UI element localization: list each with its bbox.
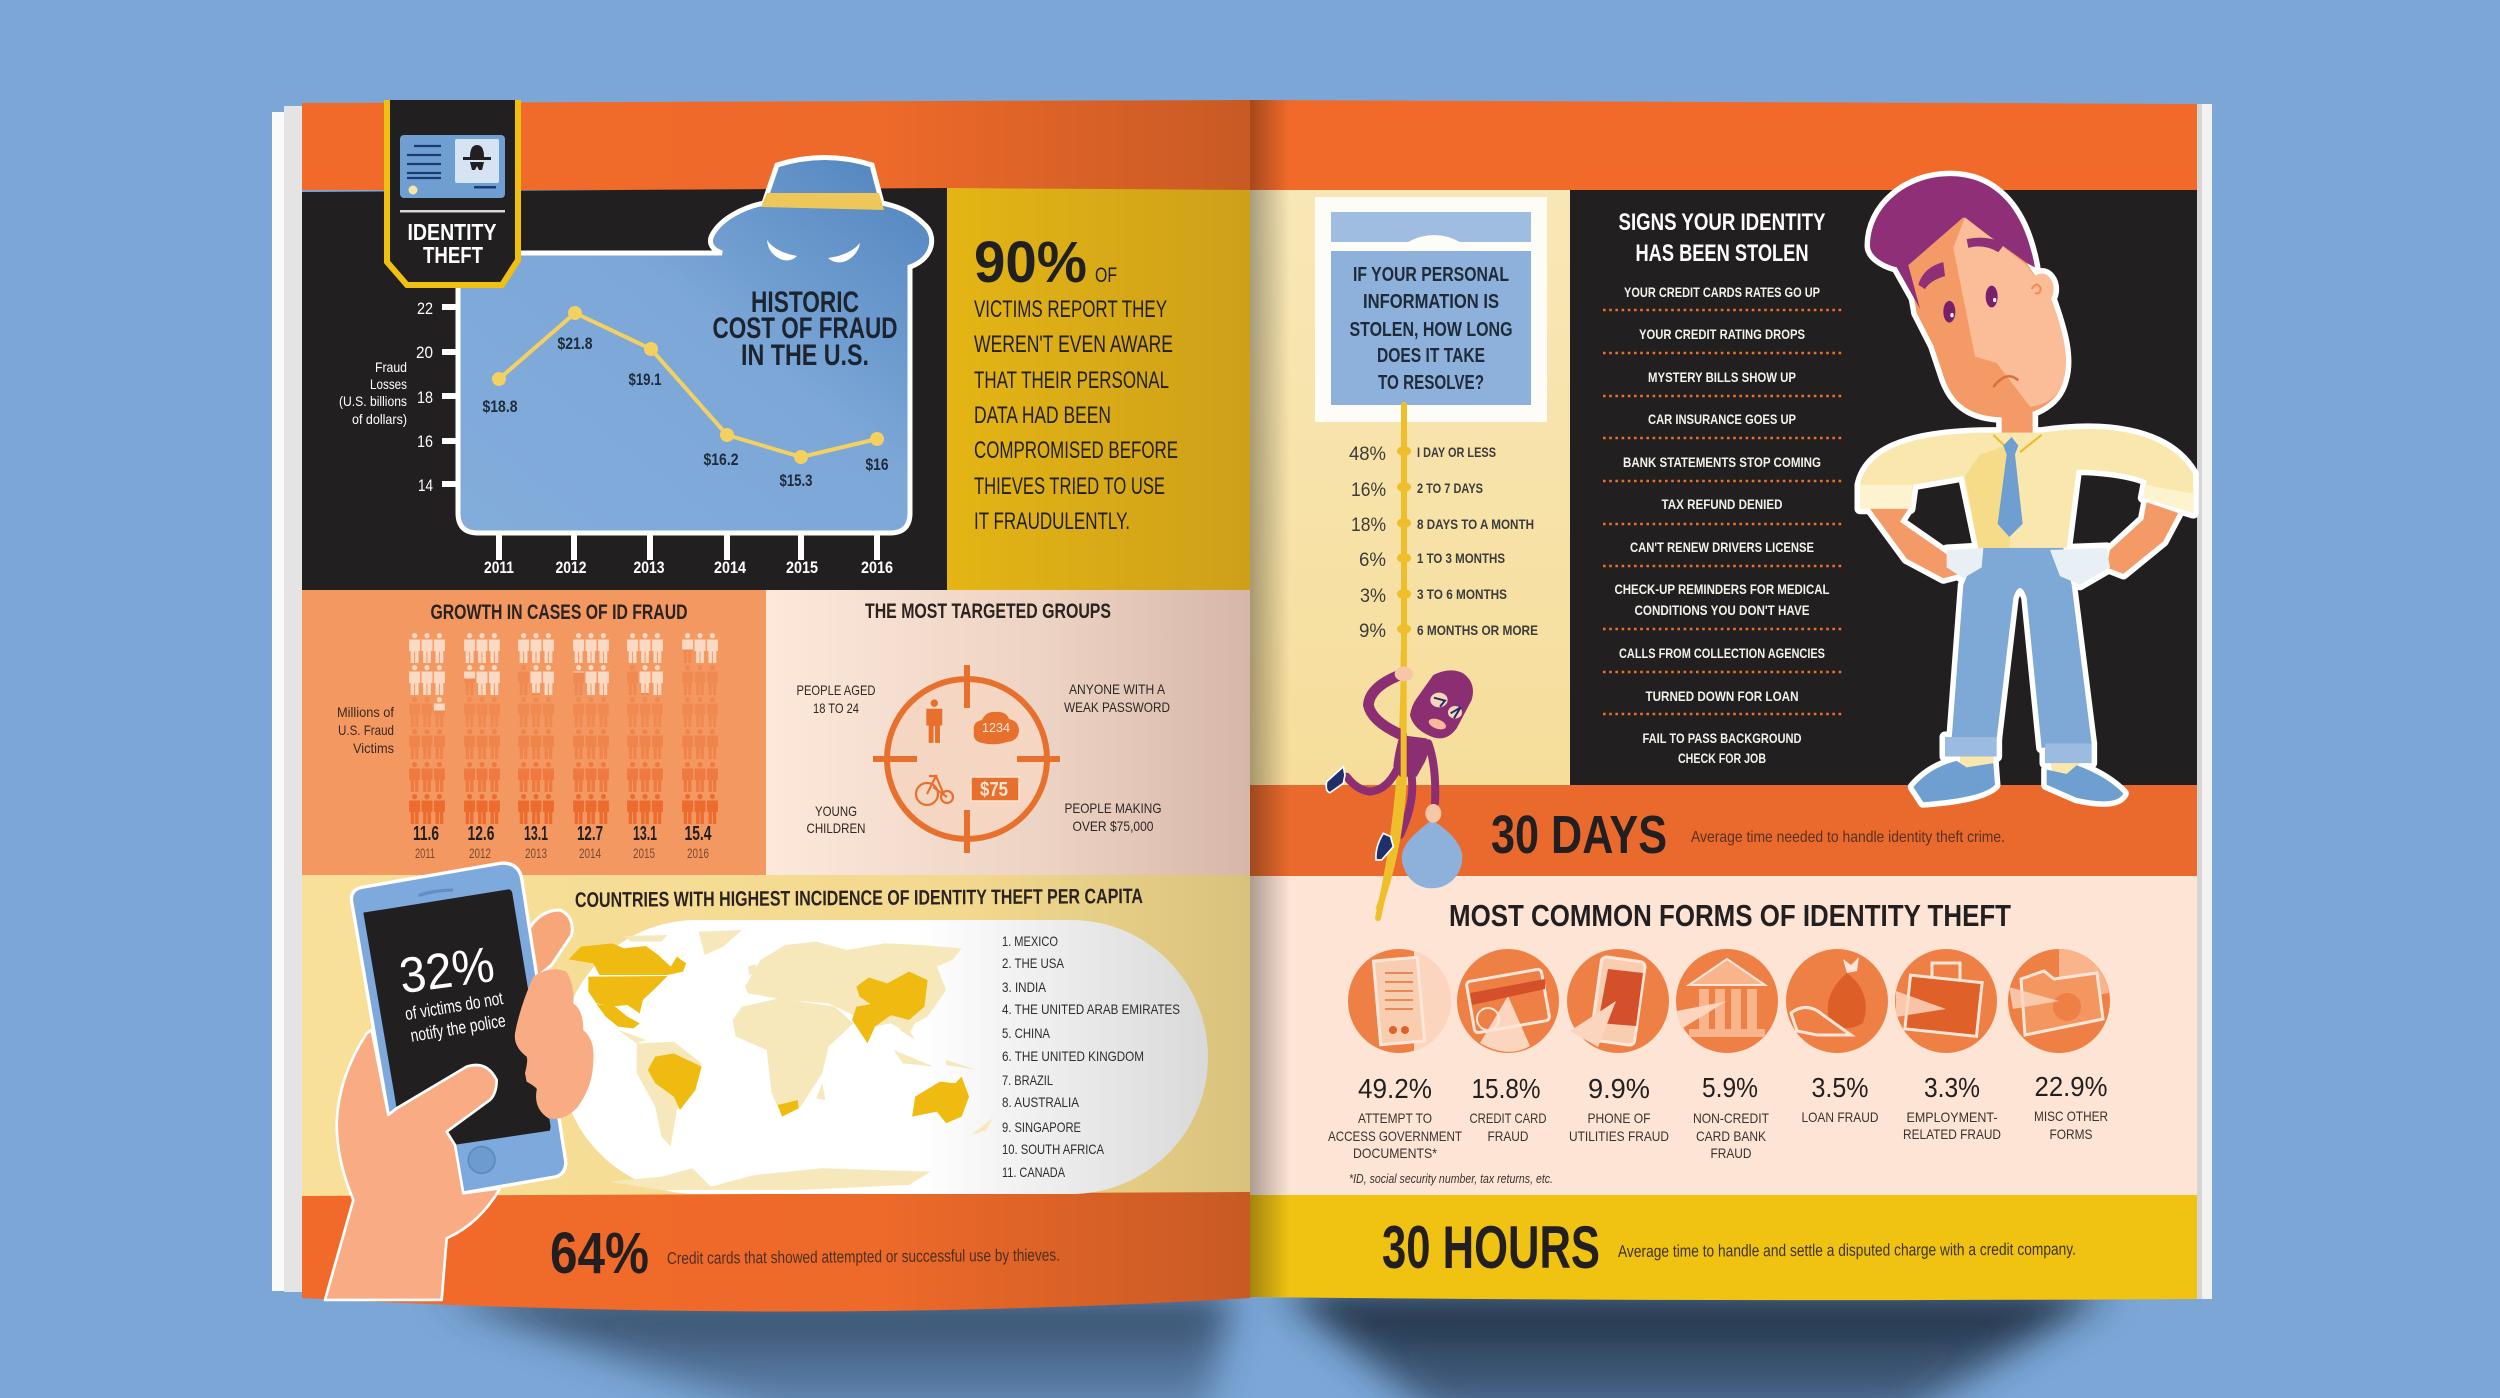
group labels: YOUNG [815,803,857,819]
chart title: IN THE U.S. [741,339,869,372]
signs list: MYSTERY BILLS SHOW UP [1648,370,1796,385]
icon: tricycle [916,776,953,805]
y axis title: of dollars) [352,411,407,427]
timeline: percent list [1349,405,1538,918]
callout: 64%: Credit cards that showed attempted or successful use by thieves. [667,1246,1060,1268]
country list: 6. THE UNITED KINGDOM [1002,1048,1144,1064]
loot bag [1402,820,1462,888]
icon: money: $75 [980,779,1008,801]
value labels: $16 [866,455,888,474]
years: 2016 [687,845,709,861]
duration labels: 3 TO 6 MONTHS [1417,586,1507,602]
spine shade [1250,100,1290,1297]
percent values: 9.9% [1588,1073,1650,1104]
category labels: UTILITIES FRAUD [1569,1128,1669,1144]
category labels: CREDIT CARD [1470,1110,1546,1126]
duration labels: 6 MONTHS OR MORE [1417,622,1538,638]
band text: 30 days: Average time needed to handle identity theft crime. [1691,829,2005,846]
icon: document [1348,949,1451,1053]
y axis labels [416,299,433,495]
chart title [712,286,898,372]
rear finger [528,910,572,980]
band: 30 days [1250,785,2197,876]
phone text: notify the police [409,1010,507,1046]
country list: 8. AUSTRALIA [1002,1094,1080,1110]
sign text: TO RESOLVE? [1378,372,1484,394]
sign text: STOLEN, HOW LONG [1350,319,1512,341]
band text: 30 days: 30 DAYS [1491,805,1667,865]
percent values: 48% [1349,444,1386,465]
country list: 9. SINGAPORE [1002,1119,1081,1135]
duration labels [1417,444,1538,638]
top orange band left [302,100,1250,190]
callout: 90%: 90% [974,230,1087,295]
category labels: FRAUD [1710,1145,1752,1161]
duration labels: 1 TO 3 MONTHS [1417,550,1505,566]
left page [302,100,1250,1312]
callout: 90%: THAT THEIR PERSONAL [974,367,1169,394]
group labels: WEAK PASSWORD [1064,699,1170,715]
phone text: 32% [396,936,498,1004]
rope [1378,405,1404,918]
icon: folder [2008,949,2110,1053]
duration labels: 2 TO 7 DAYS [1417,480,1483,496]
category labels: FORMS [2050,1126,2092,1142]
x axis labels: 2014 [714,558,746,577]
signs list: CONDITIONS YOU DON'T HAVE [1634,603,1810,618]
eyebrows [1918,238,2005,289]
illustration: hand holding phone [325,863,594,1300]
heading: COUNTRIES WITH HIGHEST INCIDENCE OF IDENTITY THEFT PER CAPITA [575,885,1143,912]
values: 12.7 [577,823,603,845]
x axis labels: 2013 [634,558,664,577]
page stack left [272,106,302,1292]
panel: gold 90% [947,188,1250,590]
callout: 90% [974,230,1178,535]
phone body [351,863,566,1193]
category labels [1328,1108,2108,1161]
value labels [482,334,888,490]
icon row [1348,949,2110,1053]
values: 13.1 [633,823,657,845]
sign text: INFORMATION IS [1363,291,1499,313]
category labels: DOCUMENTS* [1353,1145,1437,1161]
y axis title: (U.S. billions [339,393,407,409]
top orange band right [1250,100,2197,190]
shirt shade [1965,446,2010,548]
sign: resolve question [1315,197,1547,422]
panel content: most targeted groups [796,600,1170,853]
chart panel with hat silhouette [458,158,932,533]
ear swirl [2032,285,2041,294]
values: 15.4 [684,823,712,845]
pictogram rows [409,633,718,824]
band text: 30 hours [1382,1214,2076,1281]
panel: most common forms [1250,876,2197,1196]
panel: resolve time [1250,190,1570,786]
values [413,823,712,845]
category labels: ATTEMPT TO [1358,1110,1432,1126]
years: 2012 [469,845,491,861]
icon: ID card [400,135,505,198]
hat band [761,193,884,210]
country list: 11. CANADA [1002,1164,1066,1180]
panel: signs black [1570,190,2197,786]
years: 2015 [633,845,655,861]
chart title: HISTORIC [751,286,859,319]
heading: THE MOST TARGETED GROUPS [865,600,1111,623]
percent values: 5.9% [1702,1072,1758,1103]
category labels: CARD BANK [1696,1128,1767,1144]
years: 2014 [579,845,601,861]
y axis title: Fraud [375,359,407,375]
signs list: CAR INSURANCE GOES UP [1648,412,1796,427]
x axis labels: 2011 [484,558,514,577]
y axis ticks [442,304,456,487]
sign text [1350,264,1512,394]
sign text: IF YOUR PERSONAL [1353,264,1509,286]
signs list: CALLS FROM COLLECTION AGENCIES [1619,646,1825,661]
target crosshair [873,665,1060,853]
country list: 4. THE UNITED ARAB EMIRATES [1002,1001,1180,1017]
callout: 90%: WEREN'T EVEN AWARE [974,331,1173,358]
mouth [1993,376,2018,387]
callout: 90%: THIEVES TRIED TO USE [974,473,1165,500]
percent values: 49.2% [1358,1073,1432,1104]
x axis labels: 2012 [556,558,586,577]
panel: most targeted groups [766,590,1250,878]
hand [325,969,594,1300]
category labels: ACCESS GOVERNMENT [1328,1128,1462,1144]
callout: 90%: COMPROMISED BEFORE [974,437,1178,464]
group labels: ANYONE WITH A [1069,681,1166,697]
value labels: $16.2 [704,450,738,469]
bottom orange band left [302,1192,1250,1312]
country list: 10. SOUTH AFRICA [1002,1141,1105,1157]
signs list: YOUR CREDIT CARDS RATES GO UP [1624,285,1820,300]
category labels: NON-CREDIT [1693,1110,1769,1126]
villain eyes [767,240,860,262]
heading: HAS BEEN STOLEN [1636,240,1808,267]
x axis labels: 2016 [861,558,893,577]
chart: growth in cases of ID fraud [337,601,718,861]
signs list: CHECK FOR JOB [1678,751,1766,766]
value labels: $15.3 [780,471,812,490]
y axis labels: 14 [418,476,433,495]
percent values: 16% [1351,480,1386,501]
heading: MOST COMMON FORMS OF IDENTITY THEFT [1449,898,2011,933]
percent values: 22.9% [2034,1071,2108,1102]
shoes [1326,767,1393,860]
axis label: U.S. Fraud [338,722,394,738]
category labels: PHONE OF [1588,1110,1650,1126]
shirt cuffs [1860,485,2193,513]
country list: 3. INDIA [1002,979,1047,995]
panel content: countries [560,885,1208,1194]
percent values: 3.5% [1812,1072,1868,1103]
axis label [337,704,394,756]
footnote: *ID, social security number, tax returns, etc. [1349,1171,1553,1186]
thief limbs and torso [1347,675,1435,835]
category labels: LOAN FRAUD [1802,1109,1878,1125]
illustration: thief on rope [1326,650,1473,910]
mask [1410,670,1473,738]
axis label: Victims [353,740,394,756]
percent values: 18% [1351,515,1386,536]
heading: SIGNS YOUR IDENTITY [1618,209,1826,236]
country list [1002,933,1180,1180]
illustration: man with empty pockets [1860,176,2193,802]
phone text: of victims do not [404,988,504,1024]
line series [492,306,884,464]
percent values [1358,1071,2108,1104]
x axis labels [484,558,893,577]
callout: 64% [550,1221,1060,1286]
sign text: DOES IT TAKE [1377,345,1485,367]
group labels: 18 TO 24 [813,700,859,716]
gripping hand [1395,667,1413,681]
heading [1618,209,1826,267]
callout: 90%: DATA HAD BEEN [974,402,1111,429]
icon: password cloud: 1234 [982,720,1010,735]
country list: 1. MEXICO [1002,933,1058,949]
x axis labels: 2015 [786,558,818,577]
category labels: MISC OTHER [2034,1108,2108,1124]
group labels: CHILDREN [806,820,866,836]
percent values: 9% [1359,621,1386,642]
signs list: YOUR CREDIT RATING DROPS [1639,327,1805,342]
value labels: $19.1 [628,370,662,389]
heading: GROWTH IN CASES OF ID FRAUD [430,601,688,624]
category labels: EMPLOYMENT- [1906,1109,1998,1125]
phone text [396,936,507,1046]
signs list: FAIL TO PASS BACKGROUND [1642,731,1802,746]
collar [1993,435,2042,452]
years [415,845,709,861]
percent values: 15.8% [1472,1073,1540,1104]
years: 2011 [415,845,435,861]
chart: historic cost of fraud [339,158,932,577]
signs list: CHECK-UP REMINDERS FOR MEDICAL [1614,582,1830,597]
black chart panel [302,188,947,590]
y axis title: Losses [370,376,407,392]
category labels: RELATED FRAUD [1903,1126,2001,1142]
map pill [560,920,1208,1194]
rope markers [1397,446,1411,634]
icon: money [971,777,1019,801]
icon: person [926,699,942,743]
group labels: PEOPLE MAKING [1064,800,1162,816]
book shadow [440,1290,2110,1398]
group labels: PEOPLE AGED [796,682,876,698]
chart title: COST OF FRAUD [712,312,898,345]
rope over body [1378,650,1404,910]
percent values: 3% [1360,586,1386,607]
band text: 30 hours: Average time to handle and settle a disputed charge with a credit company. [1618,1240,2076,1261]
page stack right [2197,104,2212,1299]
band: 30 hours [1250,1195,2197,1300]
signs list: TURNED DOWN FOR LOAN [1646,689,1798,704]
panel: growth of ID fraud [302,590,766,878]
y axis title [339,359,407,427]
duration labels: 8 DAYS TO A MONTH [1417,516,1534,532]
x axis ticks [499,533,877,560]
band text: 30 hours: 30 HOURS [1382,1214,1600,1281]
values: 12.6 [468,823,494,845]
y axis labels: 18 [417,388,433,407]
years: 2013 [525,845,547,861]
axis label: Millions of [337,704,394,720]
group labels [796,681,1170,836]
panel content: most common forms [1328,898,2110,1186]
icon: credit card [1457,949,1559,1053]
values: 11.6 [413,823,439,845]
country list: 2. THE USA [1002,955,1065,971]
signs list [1614,285,1830,766]
y axis labels: 22 [417,299,433,318]
badge title [408,219,496,268]
tie [1998,437,2023,537]
signs list: BANK STATEMENTS STOP COMING [1623,455,1821,470]
icon: bank [1676,949,1778,1053]
signs list: CAN'T RENEW DRIVERS LICENSE [1630,540,1814,555]
signs list: TAX REFUND DENIED [1662,497,1783,512]
eyes [1943,286,1998,323]
country list: 7. BRAZIL [1002,1072,1053,1088]
callout: 90%: OF [1095,264,1117,287]
world map [569,930,993,1190]
y axis labels: 20 [416,343,433,362]
value labels: $18.8 [482,397,518,416]
category labels: FRAUD [1488,1128,1528,1144]
values: 13.1 [524,823,548,845]
icon: briefcase [1895,949,1997,1053]
badge: identity theft [387,100,518,285]
callout: 90%: VICTIMS REPORT THEY [974,296,1167,323]
face light side [1953,217,2066,407]
badge title: IDENTITY [408,219,496,245]
y axis labels: 16 [417,432,433,451]
value labels: $21.8 [558,334,592,353]
callout: 90%: IT FRAUDULENTLY. [974,508,1130,535]
icon: password cloud [974,712,1019,744]
badge title: THEFT [423,242,483,268]
panel: countries [302,875,1250,1197]
percent values: 6% [1359,550,1386,571]
duration labels: I DAY OR LESS [1417,444,1496,460]
band text: 30 days [1491,805,2005,865]
panel content: signs of stolen identity [1603,209,1842,766]
group labels: OVER $75,000 [1072,818,1154,834]
right page [1250,100,2197,1300]
callout: 64%: 64% [550,1221,649,1286]
icon: phone [1567,949,1669,1053]
country list: 5. CHINA [1002,1025,1051,1041]
percent values: 3.3% [1924,1072,1980,1103]
percent values [1349,444,1386,642]
icon: loan [1786,949,1888,1053]
